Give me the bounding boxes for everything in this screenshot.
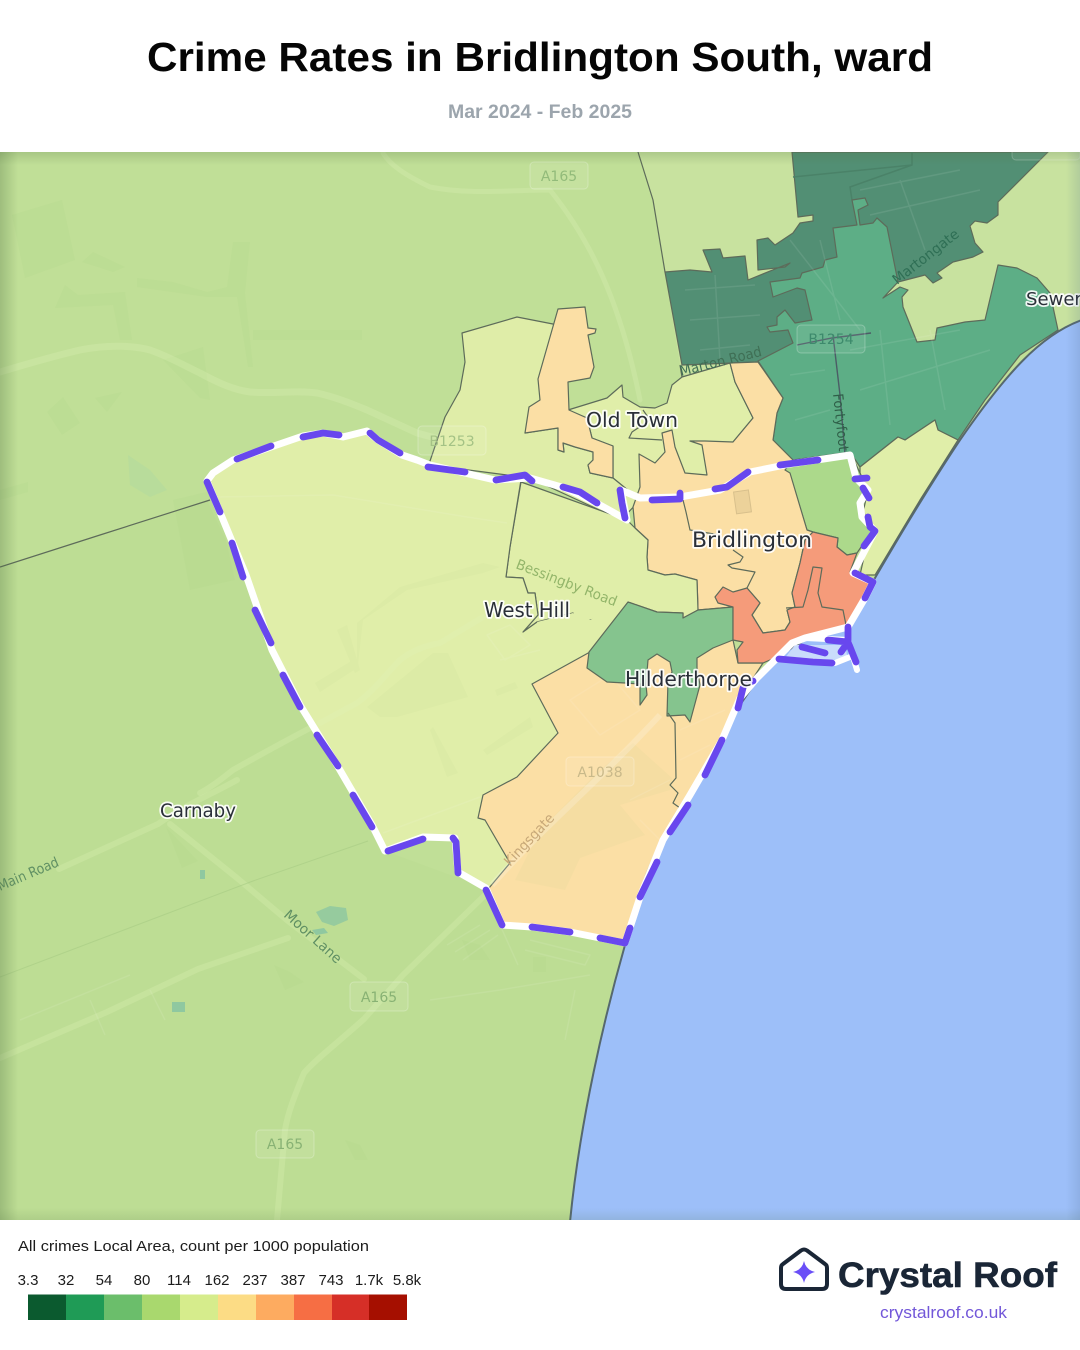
ward: mid green north-east <box>758 198 1058 467</box>
road name labels: Martongate <box>890 226 963 288</box>
icon: house with star <box>781 1250 827 1289</box>
dark green ward inner line <box>793 152 912 200</box>
ward: salmon high-crime area <box>715 532 873 663</box>
road badges: A1038 <box>577 765 623 781</box>
road name labels: Fortyfoot <box>829 393 851 453</box>
title: Crime Rates in Bridlington South, ward <box>147 34 933 80</box>
road name labels <box>0 226 963 967</box>
legend scale labels: 5.8k <box>393 1272 422 1289</box>
legend scale labels: 743 <box>318 1272 344 1289</box>
wordmark: Crystal Roof <box>838 1256 1057 1295</box>
place labels: Bridlington <box>692 528 812 552</box>
ward: coastal light yellow <box>860 420 958 575</box>
legend scale labels: 54 <box>96 1272 112 1289</box>
harbour basin <box>785 645 848 660</box>
map edge vignette <box>0 152 1080 1220</box>
legend colour bar <box>28 1294 407 1320</box>
yellow underlay by West Hill <box>573 601 630 650</box>
street texture north-east <box>685 170 990 425</box>
background fields and roads <box>0 153 640 1220</box>
legend scale labels <box>18 1272 422 1289</box>
road badges: B1254 <box>808 332 854 348</box>
road badges: A165 <box>541 169 577 185</box>
sea <box>570 320 1080 1222</box>
road name labels: Kingsgate <box>501 811 558 870</box>
road name labels: Moor Lane <box>280 907 345 967</box>
website url: crystalroof.co.uk <box>880 1304 1008 1322</box>
ward: Bridlington orange centre <box>633 362 813 640</box>
logo: Crystal Roof <box>781 1250 1057 1322</box>
ward: orange Hilderthorpe south <box>478 640 763 943</box>
ward: Old Town yellow <box>568 363 753 500</box>
dividing line west <box>0 500 210 567</box>
legend scale labels: 3.3 <box>18 1272 38 1289</box>
legend scale labels: 162 <box>204 1272 230 1289</box>
road badges: B1253 <box>429 434 475 450</box>
ward: west yellow south of boundary <box>506 482 698 632</box>
legend scale labels: 237 <box>242 1272 268 1289</box>
legend scale labels: 1.7k <box>355 1272 384 1289</box>
road name labels: Marton Road <box>678 344 763 380</box>
road name labels: Bessingby Road <box>514 557 619 610</box>
legend scale labels: 80 <box>134 1272 150 1289</box>
place labels <box>160 289 1080 822</box>
built-up patch in orange ward <box>515 743 672 890</box>
ward: Hilderthorpe mid green <box>587 602 733 722</box>
ward: dark green north <box>665 152 1048 365</box>
ward inner boundaries <box>506 333 871 808</box>
ward: big West Hill yellow <box>207 431 590 888</box>
ward: green beside Bridlington centre <box>786 459 870 554</box>
place labels: Old Town <box>586 408 678 432</box>
place labels: Carnaby <box>160 800 236 822</box>
legend <box>18 1238 422 1320</box>
place labels: West Hill <box>484 598 570 622</box>
legend scale labels: 114 <box>167 1272 191 1289</box>
legend scale labels: 387 <box>280 1272 306 1289</box>
place labels: Hilderthorpe <box>625 667 752 691</box>
road badges: A165 <box>361 990 397 1006</box>
legend scale labels: 32 <box>58 1272 74 1289</box>
road badges: A165 <box>267 1137 303 1153</box>
legend title: All crimes Local Area, count per 1000 population <box>18 1238 369 1255</box>
ward boundary: Bridlington South <box>207 431 875 943</box>
ward: orange north-west <box>525 307 613 478</box>
ward: north-west yellow <box>430 317 640 520</box>
West Hill fields and roads <box>217 495 540 833</box>
road badges <box>256 140 1080 1158</box>
coast line north of harbour <box>638 152 665 272</box>
subtitle: date range: Mar 2024 - Feb 2025 <box>448 102 632 123</box>
